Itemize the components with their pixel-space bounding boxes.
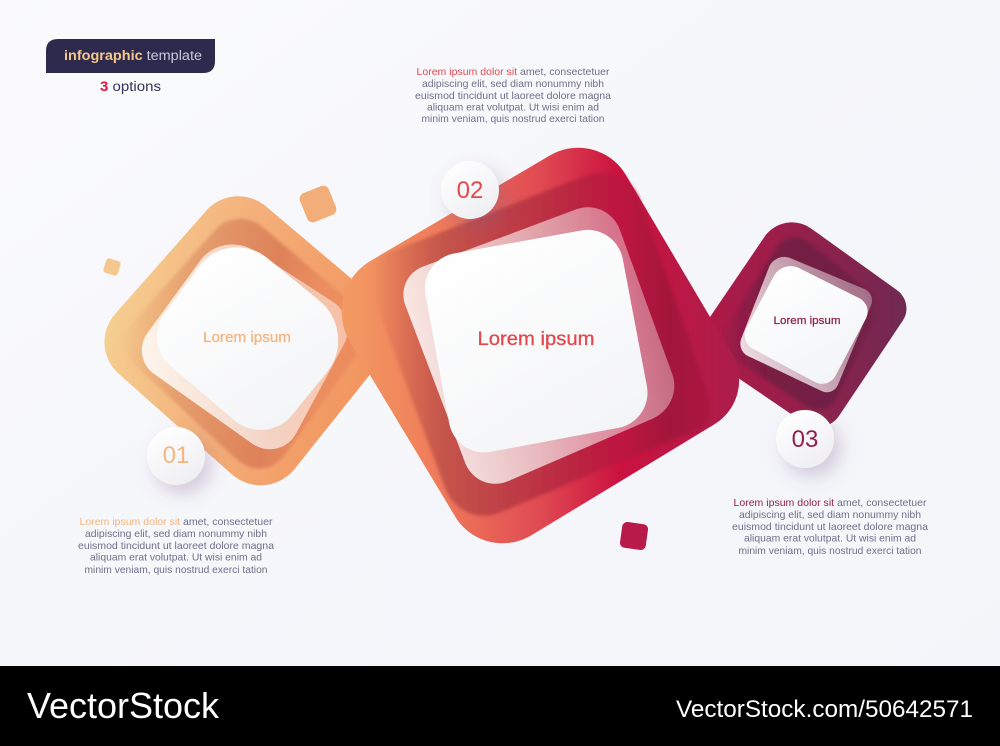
- badge: 01: 01: [163, 442, 189, 469]
- text block: option 03: adipiscing elit, sed diam nonummy nibh: [739, 509, 921, 521]
- text block: option 01: euismod tincidunt ut laoreet dolore magna: [78, 540, 274, 552]
- text block: option 03: [732, 497, 928, 557]
- label: option 02 title: Lorem ipsum: [478, 329, 594, 350]
- footer bar: [0, 666, 1000, 746]
- text block: option 01: [78, 516, 274, 576]
- badge: 03: [776, 410, 834, 468]
- badge: 01: [147, 427, 205, 485]
- text block: option 01: adipiscing elit, sed diam nonummy nibh: [85, 528, 267, 540]
- text block: option 01: minim veniam, quis nostrud exerci tation: [84, 564, 268, 576]
- subtitle: 3 options: 3 options: [100, 79, 161, 94]
- label: option 03 title: Lorem ipsum: [774, 315, 840, 327]
- text block: option 02: minim veniam, quis nostrud exerci tation: [422, 113, 605, 125]
- text block: option 02: [415, 66, 611, 125]
- footer bar: VectorStock.com/50642571: [676, 696, 973, 723]
- icon: tiny yellow square: [103, 258, 121, 276]
- header tag: [46, 39, 215, 73]
- badge: 02: 02: [457, 177, 483, 204]
- text block: option 03: minim veniam, quis nostrud exerci tation: [738, 545, 922, 557]
- text block: option 01: aliquam erat volutpat. Ut wisi enim ad: [90, 552, 262, 564]
- header tag: infographic template: [64, 48, 202, 63]
- text block: option 03: euismod tincidunt ut laoreet dolore magna: [732, 521, 928, 533]
- icon: small orange square: [298, 184, 338, 224]
- text block: option 02: aliquam erat volutpat. Ut wisi enim ad: [427, 102, 599, 114]
- shape: option 03 diamond: [699, 222, 906, 427]
- badge: 03: 03: [792, 426, 818, 453]
- shape: option 02 diamond: [342, 148, 739, 543]
- icon: small crimson square: [619, 521, 649, 551]
- text block: option 03: Lorem ipsum dolor sit amet, consectetuer: [734, 497, 927, 509]
- text block: option 02: Lorem ipsum dolor sit amet, consectetuer: [416, 66, 610, 78]
- text block: option 01: Lorem ipsum dolor sit amet, consectetuer: [80, 516, 273, 528]
- text block: option 02: euismod tincidunt ut laoreet dolore magna: [415, 90, 611, 102]
- badge: 02: [441, 161, 499, 219]
- footer bar: VectorStock: [27, 685, 220, 726]
- text block: option 02: adipiscing elit, sed diam nonummy nibh: [422, 78, 604, 90]
- text block: option 03: aliquam erat volutpat. Ut wisi enim ad: [744, 532, 916, 544]
- label: option 01 title: Lorem ipsum: [203, 330, 291, 346]
- shape: option 01 diamond: [104, 196, 394, 485]
